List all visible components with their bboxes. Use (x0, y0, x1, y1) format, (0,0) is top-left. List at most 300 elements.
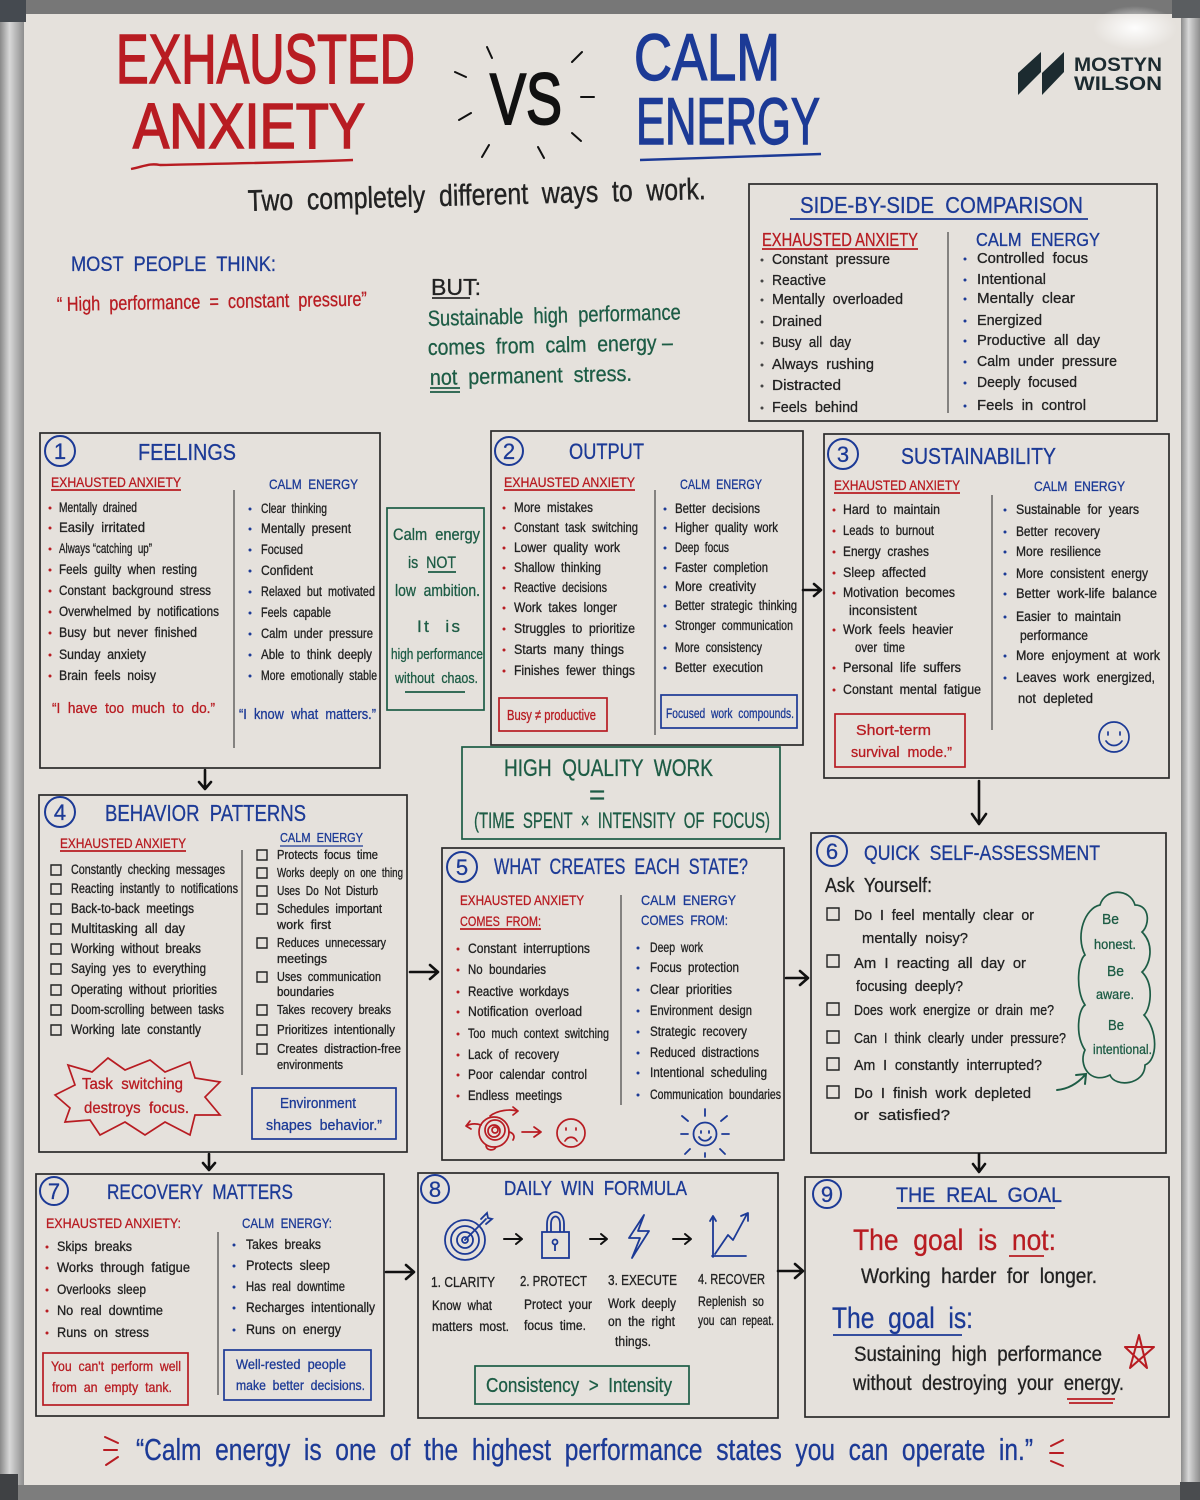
recovery: calm column: CALM ENERGY: (242, 1215, 332, 1231)
heading: calm energy: CALM (634, 20, 780, 94)
text block: but: BUT: (431, 274, 481, 300)
sustainability: calm column: Better work-life balance (1016, 586, 1157, 601)
behavior: exhausted checklist: Working without breaks (71, 941, 201, 956)
what creates: exhausted column: No boundaries (468, 962, 546, 977)
behavior: calm checklist: work first (276, 918, 332, 932)
step labels: 2. PROTECT (520, 1273, 587, 1290)
ask yourself label: Ask Yourself: (825, 875, 932, 897)
behavior: calm checklist: Creates distraction-free (277, 1042, 401, 1056)
formula: high quality work (462, 747, 780, 839)
sustainability: exhausted column (834, 477, 981, 767)
sustainability: calm column: Leaves work energized, (1016, 670, 1155, 685)
output: calm column: CALM ENERGY (680, 476, 763, 492)
output: exhausted column: More mistakes (514, 500, 593, 515)
number badge 6: 6 (826, 839, 838, 864)
behavior: calm checklist: Uses Do Not Disturb (277, 884, 378, 898)
sustainability: exhausted column: Energy crashes (843, 544, 929, 559)
comparison: exhausted column: Always rushing (772, 356, 874, 373)
recovery: calm column: Well-rested people (236, 1356, 346, 1372)
text block: but (427, 274, 681, 392)
the goal is (832, 1302, 1124, 1403)
recovery: exhausted column: No real downtime (57, 1303, 163, 1318)
sustainability: exhausted column: Sleep affected (843, 565, 926, 580)
text block: most people think (57, 253, 367, 316)
panel: side-by-side comparison (749, 184, 1157, 421)
cloud: be honest, aware, intentional: intentional. (1093, 1041, 1152, 1057)
sustainability: exhausted column: EXHAUSTED ANXIETY (834, 477, 961, 493)
sustainability: calm column: Better recovery (1016, 524, 1100, 539)
behavior: calm checklist: Protects focus time (277, 848, 378, 862)
cloud: be honest, aware, intentional: honest. (1094, 936, 1136, 952)
icon: sad face (557, 1119, 585, 1147)
the goal is not: The goal is not: (853, 1224, 1056, 1257)
formula: high quality work: = (589, 779, 605, 810)
output: exhausted column: Work takes longer (514, 600, 617, 615)
sustainability: exhausted column: Short-term (856, 722, 931, 739)
the goal is not (853, 1224, 1097, 1288)
behavior: calm checklist: Reduces unnecessary (277, 936, 387, 950)
arrow: behavior to recovery (203, 1154, 215, 1170)
icon: chaos scribble with arrows (466, 1107, 541, 1150)
what creates: calm column: Clear priorities (650, 982, 732, 997)
the goal is: The goal is: (832, 1302, 973, 1335)
sustainability: calm column: Sustainable for years (1016, 502, 1139, 517)
sustainability: exhausted column: survival mode.” (851, 744, 952, 761)
subtitle: Two completely different ways to work. (247, 173, 706, 218)
recovery: calm column: Protects sleep (246, 1258, 330, 1273)
icon: padlock (542, 1212, 569, 1258)
question checklist: Do I feel mentally clear or (854, 907, 1034, 924)
what creates: exhausted column: Constant interruptions (468, 941, 590, 956)
step descriptions: Replenish so (698, 1294, 764, 1309)
behavior: exhausted checklist: Multitasking all day (71, 921, 185, 936)
arrow: what creates to self-assessment (786, 971, 808, 985)
callout: task switching starburst (55, 1058, 220, 1135)
behavior: calm checklist: Uses communication (277, 970, 381, 984)
number badge 7 (40, 1177, 68, 1205)
comparison: exhausted column: Reactive (772, 272, 826, 289)
arrow: clarity to protect (504, 1234, 522, 1244)
number badge 8 (421, 1175, 449, 1203)
arrow: execute to recover (673, 1234, 691, 1244)
step descriptions: Protect your (524, 1297, 592, 1312)
sustainability: exhausted column: Work feels heavier (843, 622, 953, 637)
number badge 8: 8 (429, 1177, 441, 1202)
behavior: calm checklist: environments (277, 1058, 343, 1072)
recovery: exhausted column: from an empty tank. (52, 1379, 172, 1395)
output: exhausted column (499, 474, 638, 731)
feelings: calm column: CALM ENERGY (269, 476, 359, 492)
number badge 5 (447, 852, 477, 882)
recovery: calm column: Runs on energy (246, 1322, 341, 1337)
sustainability: calm column: CALM ENERGY (1034, 478, 1126, 494)
arrow: behavior to what creates (410, 965, 438, 979)
recovery: exhausted column: Works through fatigue (57, 1260, 190, 1275)
recovery: exhausted column: Runs on stress (57, 1325, 149, 1340)
sustainability: calm column: More resilience (1016, 544, 1101, 559)
output: exhausted column: Lower quality work (514, 540, 620, 555)
arrow: protect to execute (590, 1234, 607, 1244)
recovery: calm column (224, 1215, 375, 1400)
recovery: exhausted column: Skips breaks (57, 1239, 132, 1254)
feelings: exhausted column: Feels guilty when resting (59, 562, 197, 577)
sustainability: calm column: More enjoyment at work (1016, 648, 1160, 663)
feelings: calm column: Able to think deeply (261, 647, 372, 662)
what creates: calm column: COMES FROM: (641, 912, 728, 928)
heading: vs: VS (490, 60, 562, 140)
behavior: exhausted checklist (51, 835, 238, 1037)
comparison: calm column: Controlled focus (977, 250, 1088, 267)
behavior: exhausted checklist: EXHAUSTED ANXIETY (60, 835, 187, 851)
cloud: be honest, aware, intentional: Be (1102, 911, 1119, 928)
step descriptions: you can repeat. (698, 1313, 774, 1328)
behavior: exhausted checklist: Constantly checking messages (71, 862, 225, 877)
output: calm column: Faster completion (675, 560, 768, 575)
sustainability: exhausted column: Hard to maintain (843, 502, 940, 517)
number badge 7: 7 (48, 1179, 60, 1204)
comparison: calm column (965, 230, 1117, 414)
sustainability: exhausted column: inconsistent (849, 603, 917, 618)
what creates: exhausted column: Reactive workdays (468, 984, 569, 999)
behavior heading: BEHAVIOR PATTERNS (105, 800, 306, 826)
panel 2: output (491, 431, 803, 745)
comparison: exhausted column (762, 230, 918, 416)
heading: exhausted anxiety: ANXIETY (133, 90, 365, 162)
comparison: exhausted column: Drained (772, 313, 822, 330)
number badge 3: 3 (837, 442, 849, 467)
text block: but: comes from calm energy – (428, 330, 674, 360)
callout: task switching starburst: destroys focus. (84, 1100, 189, 1117)
number badge 5: 5 (456, 855, 468, 880)
number badge 1: 1 (54, 439, 66, 464)
feelings: exhausted column: “I have too much to do.” (52, 700, 215, 717)
heading: calm energy (634, 20, 821, 160)
panel 3: sustainability (824, 434, 1169, 778)
recovery: exhausted column: Overlooks sleep (57, 1282, 146, 1297)
what creates: exhausted column (458, 892, 609, 1103)
heading: exhausted anxiety (116, 20, 415, 169)
callout: environment shapes behavior: Environment (280, 1095, 357, 1112)
output: calm column: More creativity (675, 579, 756, 594)
feelings: exhausted column: Overwhelmed by notifications (59, 604, 219, 619)
output: exhausted column: EXHAUSTED ANXIETY (504, 474, 636, 490)
cloud: be honest, aware, intentional: Be (1107, 963, 1124, 980)
recovery: calm column: Has real downtime (246, 1279, 345, 1294)
output: exhausted column: Struggles to prioritize (514, 621, 635, 636)
formula: high quality work: HIGH QUALITY WORK (504, 755, 713, 782)
what creates heading: WHAT CREATES EACH STATE? (494, 854, 748, 879)
recovery heading: RECOVERY MATTERS (107, 1181, 293, 1204)
recovery: exhausted column (43, 1215, 190, 1405)
what creates: calm column: Focus protection (650, 960, 739, 975)
what creates: exhausted column: Lack of recovery (468, 1047, 559, 1062)
feelings: calm column: Focused (261, 542, 303, 557)
arrow: daily win to real goal (778, 1264, 803, 1278)
behavior: calm checklist: CALM ENERGY (280, 830, 363, 845)
comparison heading: SIDE-BY-SIDE COMPARISON (800, 192, 1083, 218)
arrow: feelings to behavior (199, 770, 211, 789)
question checklist: Am I reacting all day or (854, 955, 1026, 972)
arrow: recovery to daily win (386, 1265, 414, 1279)
arrow: sustainability to self-assessment (972, 781, 986, 824)
what creates: exhausted column: Too much context switching (468, 1026, 609, 1041)
heading: vs (455, 47, 594, 158)
feelings: exhausted column: Always “catching up” (59, 541, 152, 556)
comparison: calm column: Deeply focused (977, 374, 1077, 391)
comparison: exhausted column: Busy all day (772, 334, 851, 351)
sustainability: calm column: not depleted (1018, 691, 1093, 706)
what creates: calm column: CALM ENERGY (641, 892, 737, 908)
callout: task switching starburst: Task switching (82, 1076, 183, 1093)
comparison: exhausted column: EXHAUSTED ANXIETY (762, 230, 918, 250)
behavior: calm checklist (257, 830, 403, 1072)
question checklist: focusing deeply? (856, 978, 963, 995)
comparison: exhausted column: Distracted (772, 377, 841, 394)
number badge 3 (828, 439, 858, 469)
cloud: be honest, aware, intentional (1079, 892, 1155, 1083)
output: calm column: More consistency (675, 640, 762, 655)
heading: calm energy: ENERGY (636, 84, 820, 158)
recovery: calm column: Recharges intentionally (246, 1300, 375, 1315)
arrow: self-assessment to real goal (973, 1154, 985, 1172)
output: exhausted column: Constant task switching (514, 520, 638, 535)
icon: target (445, 1213, 492, 1260)
output: calm column: Stronger communication (675, 618, 793, 633)
output: calm column: Focused work compounds. (666, 705, 794, 721)
output: exhausted column: Starts many things (514, 642, 624, 657)
feelings: calm column (239, 476, 377, 723)
feelings: exhausted column: EXHAUSTED ANXIETY (51, 474, 182, 490)
question checklist: Do I finish work depleted (854, 1085, 1031, 1102)
text block: most people think: MOST PEOPLE THINK: (71, 253, 276, 276)
panel 6: quick self-assessment (811, 833, 1166, 1153)
text block: but: Sustainable high performance (427, 299, 681, 331)
panel 7: recovery matters (36, 1174, 384, 1416)
logo: Mostyn Wilson: MOSTYN (1074, 55, 1162, 76)
step labels (431, 1271, 765, 1291)
what creates: calm column (638, 892, 781, 1102)
the goal is: without destroying your energy. (852, 1372, 1124, 1395)
sustainability: exhausted column: Personal life suffers (843, 660, 961, 675)
panel 4: behavior patterns (39, 795, 407, 1152)
step descriptions: matters most. (432, 1319, 509, 1334)
question checklist (827, 907, 1066, 1124)
logo: Mostyn Wilson: WILSON (1074, 74, 1162, 95)
step labels: 1. CLARITY (431, 1274, 495, 1291)
output: exhausted column: Reactive decisions (514, 580, 607, 595)
what creates: exhausted column: Endless meetings (468, 1088, 562, 1103)
feelings: calm column: Mentally present (261, 521, 351, 536)
step descriptions: Know what (432, 1298, 492, 1313)
comparison: exhausted column: Feels behind (772, 399, 858, 416)
icon: rising chart (710, 1213, 748, 1257)
number badge 1 (45, 436, 75, 466)
comparison: calm column: Calm under pressure (977, 353, 1117, 370)
step descriptions (432, 1294, 774, 1349)
question checklist: Am I constantly interrupted? (854, 1057, 1042, 1074)
callout: calm energy is not low ambition: It is (417, 617, 460, 636)
question checklist: mentally noisy? (862, 930, 968, 947)
comparison: calm column: Productive all day (977, 332, 1100, 349)
output: exhausted column: Finishes fewer things (514, 663, 635, 678)
what creates: calm column: Environment design (650, 1003, 752, 1018)
feelings: calm column: Calm under pressure (261, 626, 373, 641)
comparison: calm column: CALM ENERGY (976, 230, 1100, 250)
feelings: calm column: Relaxed but motivated (261, 584, 375, 599)
cloud: be honest, aware, intentional: aware. (1096, 986, 1134, 1002)
output: calm column: Higher quality work (675, 520, 778, 535)
panel 1: feelings (40, 433, 380, 768)
arrow: output to sustainability (803, 584, 821, 596)
step descriptions: focus time. (524, 1318, 586, 1333)
callout: consistency over intensity: Consistency > Intensity (486, 1375, 672, 1397)
sustainability heading: SUSTAINABILITY (901, 443, 1056, 469)
recovery: exhausted column: EXHAUSTED ANXIETY: (46, 1215, 181, 1231)
step descriptions: on the right (608, 1314, 675, 1329)
output: exhausted column: Busy ≠ productive (507, 707, 596, 724)
sustainability: calm column: More consistent energy (1016, 566, 1148, 581)
behavior: calm checklist: Prioritizes intentionally (277, 1023, 396, 1037)
icon: lightning bolt (629, 1215, 649, 1258)
feelings: exhausted column: Sunday anxiety (59, 647, 146, 662)
sustainability: exhausted column: Motivation becomes (843, 585, 955, 600)
output: calm column: Better decisions (675, 501, 760, 516)
feelings: exhausted column: Easily irritated (59, 520, 145, 535)
output: calm column: Deep focus (675, 540, 729, 555)
recovery: exhausted column: You can't perform well (51, 1358, 181, 1374)
the goal is not: Working harder for longer. (861, 1265, 1097, 1288)
callout: environment shapes behavior: shapes behavior.” (266, 1117, 382, 1134)
callout: environment shapes behavior (252, 1088, 396, 1139)
feelings: exhausted column: Constant background stress (59, 583, 211, 598)
callout: calm energy is not low ambition (387, 508, 484, 710)
panel 5: what creates each state (442, 848, 784, 1160)
what creates: calm column: Strategic recovery (650, 1024, 747, 1039)
title (116, 20, 821, 169)
callout: calm energy is not low ambition: high performance (391, 646, 483, 663)
question checklist: Can I think clearly under pressure? (854, 1030, 1066, 1047)
number badge 9 (813, 1180, 841, 1208)
step descriptions: things. (615, 1334, 651, 1349)
behavior: calm checklist: Takes recovery breaks (277, 1003, 391, 1017)
feelings: calm column: Feels capable (261, 605, 331, 620)
feelings: calm column: Confident (261, 563, 313, 578)
number badge 2: 2 (503, 439, 515, 464)
sustainability: exhausted column: Leads to burnout (843, 523, 934, 538)
behavior: calm checklist: boundaries (277, 985, 334, 999)
what creates: calm column: Communication boundaries (650, 1087, 781, 1102)
output: calm column: Better strategic thinking (675, 598, 797, 613)
feelings: exhausted column: Busy but never finished (59, 625, 197, 640)
recovery: calm column: make better decisions. (236, 1377, 365, 1393)
sustainability: calm column: performance (1020, 628, 1088, 643)
question checklist: or satisfied? (854, 1107, 950, 1124)
icon: red star (1125, 1335, 1154, 1368)
what creates: calm column: Reduced distractions (650, 1045, 759, 1060)
callout: calm energy is not low ambition: Calm energy (393, 525, 480, 544)
comparison: calm column: Intentional (977, 271, 1046, 288)
icon: smiley (1099, 722, 1129, 752)
behavior: exhausted checklist: Saying yes to everything (71, 961, 206, 976)
callout: calm energy is not low ambition: is NOT (408, 553, 456, 572)
feelings: exhausted column: Brain feels noisy (59, 668, 156, 683)
what creates: calm column: Deep work (650, 940, 703, 955)
feelings: calm column: Clear thinking (261, 501, 327, 516)
number badge 4: 4 (54, 800, 66, 825)
what creates: exhausted column: COMES FROM: (460, 913, 541, 929)
what creates: exhausted column: Notification overload (468, 1004, 582, 1019)
heading: exhausted anxiety: EXHAUSTED (116, 20, 415, 98)
feelings: calm column: “I know what matters.” (239, 706, 376, 723)
comparison: calm column: Energized (977, 312, 1042, 329)
feelings: exhausted column: Mentally drained (59, 500, 137, 515)
behavior: exhausted checklist: Working late constantly (71, 1022, 201, 1037)
sustainability: exhausted column: over time (855, 640, 905, 655)
number badge 9: 9 (821, 1182, 833, 1207)
comparison: exhausted column: Constant pressure (772, 251, 890, 268)
recovery: calm column: Takes breaks (246, 1237, 321, 1252)
callout: consistency over intensity (475, 1366, 689, 1404)
comparison: calm column: Feels in control (977, 397, 1086, 414)
output: calm column (661, 476, 797, 728)
behavior: exhausted checklist: Reacting instantly to notifications (71, 881, 238, 896)
panel 8: daily win formula (418, 1173, 778, 1418)
callout: calm energy is not low ambition: without chaos. (394, 670, 478, 687)
logo: Mostyn Wilson (1018, 52, 1162, 95)
panel 9: the real goal (805, 1177, 1169, 1417)
behavior: exhausted checklist: Operating without priorities (71, 982, 217, 997)
feelings: calm column: More emotionally stable (261, 668, 377, 683)
self-assessment heading: QUICK SELF-ASSESSMENT (864, 842, 1100, 865)
arrow: green pointer to cloud (1057, 1074, 1086, 1090)
sustainability: exhausted column: Constant mental fatigue (843, 682, 981, 697)
output heading: OUTPUT (569, 439, 644, 464)
feelings heading: FEELINGS (138, 439, 236, 465)
what creates: exhausted column: EXHAUSTED ANXIETY (460, 892, 585, 908)
step descriptions: Work deeply (608, 1296, 676, 1311)
step labels: 3. EXECUTE (608, 1272, 677, 1289)
number badge 4 (45, 797, 75, 827)
behavior: calm checklist: meetings (277, 952, 327, 966)
sustainability: calm column (1005, 478, 1160, 706)
what creates: exhausted column: Poor calendar control (468, 1067, 587, 1082)
icon: smiling sun (681, 1109, 729, 1157)
behavior: exhausted checklist: Doom-scrolling between tasks (71, 1002, 224, 1017)
sustainability: calm column: Easier to maintain (1016, 609, 1121, 624)
formula: high quality work: (TIME SPENT × INTENSITY OF FOCUS) (474, 808, 770, 833)
the goal is: Sustaining high performance (854, 1343, 1102, 1366)
feelings: exhausted column (50, 474, 219, 717)
callout: calm energy is not low ambition: low ambition. (395, 581, 480, 600)
behavior: calm checklist: Works deeply on one thing (277, 866, 403, 880)
what creates: calm column: Intentional scheduling (650, 1065, 767, 1080)
text block: but: not permanent stress. (430, 361, 632, 390)
daily win heading: DAILY WIN FORMULA (504, 1178, 688, 1200)
behavior: calm checklist: Schedules important (277, 902, 382, 916)
output: calm column: Better execution (675, 660, 763, 675)
real goal heading: THE REAL GOAL (896, 1184, 1062, 1207)
question checklist: Does work energize or drain me? (854, 1002, 1054, 1019)
text block: most people think: “ High performance = constant pressure” (57, 289, 367, 316)
comparison: calm column: Mentally clear (977, 290, 1075, 307)
output: exhausted column: Shallow thinking (514, 560, 601, 575)
comparison: exhausted column: Mentally overloaded (772, 291, 903, 308)
number badge 6 (817, 836, 847, 866)
step labels: 4. RECOVER (698, 1271, 765, 1288)
cloud: be honest, aware, intentional: Be (1108, 1017, 1124, 1034)
behavior: exhausted checklist: Back-to-back meetings (71, 901, 194, 916)
number badge 2 (495, 437, 523, 465)
